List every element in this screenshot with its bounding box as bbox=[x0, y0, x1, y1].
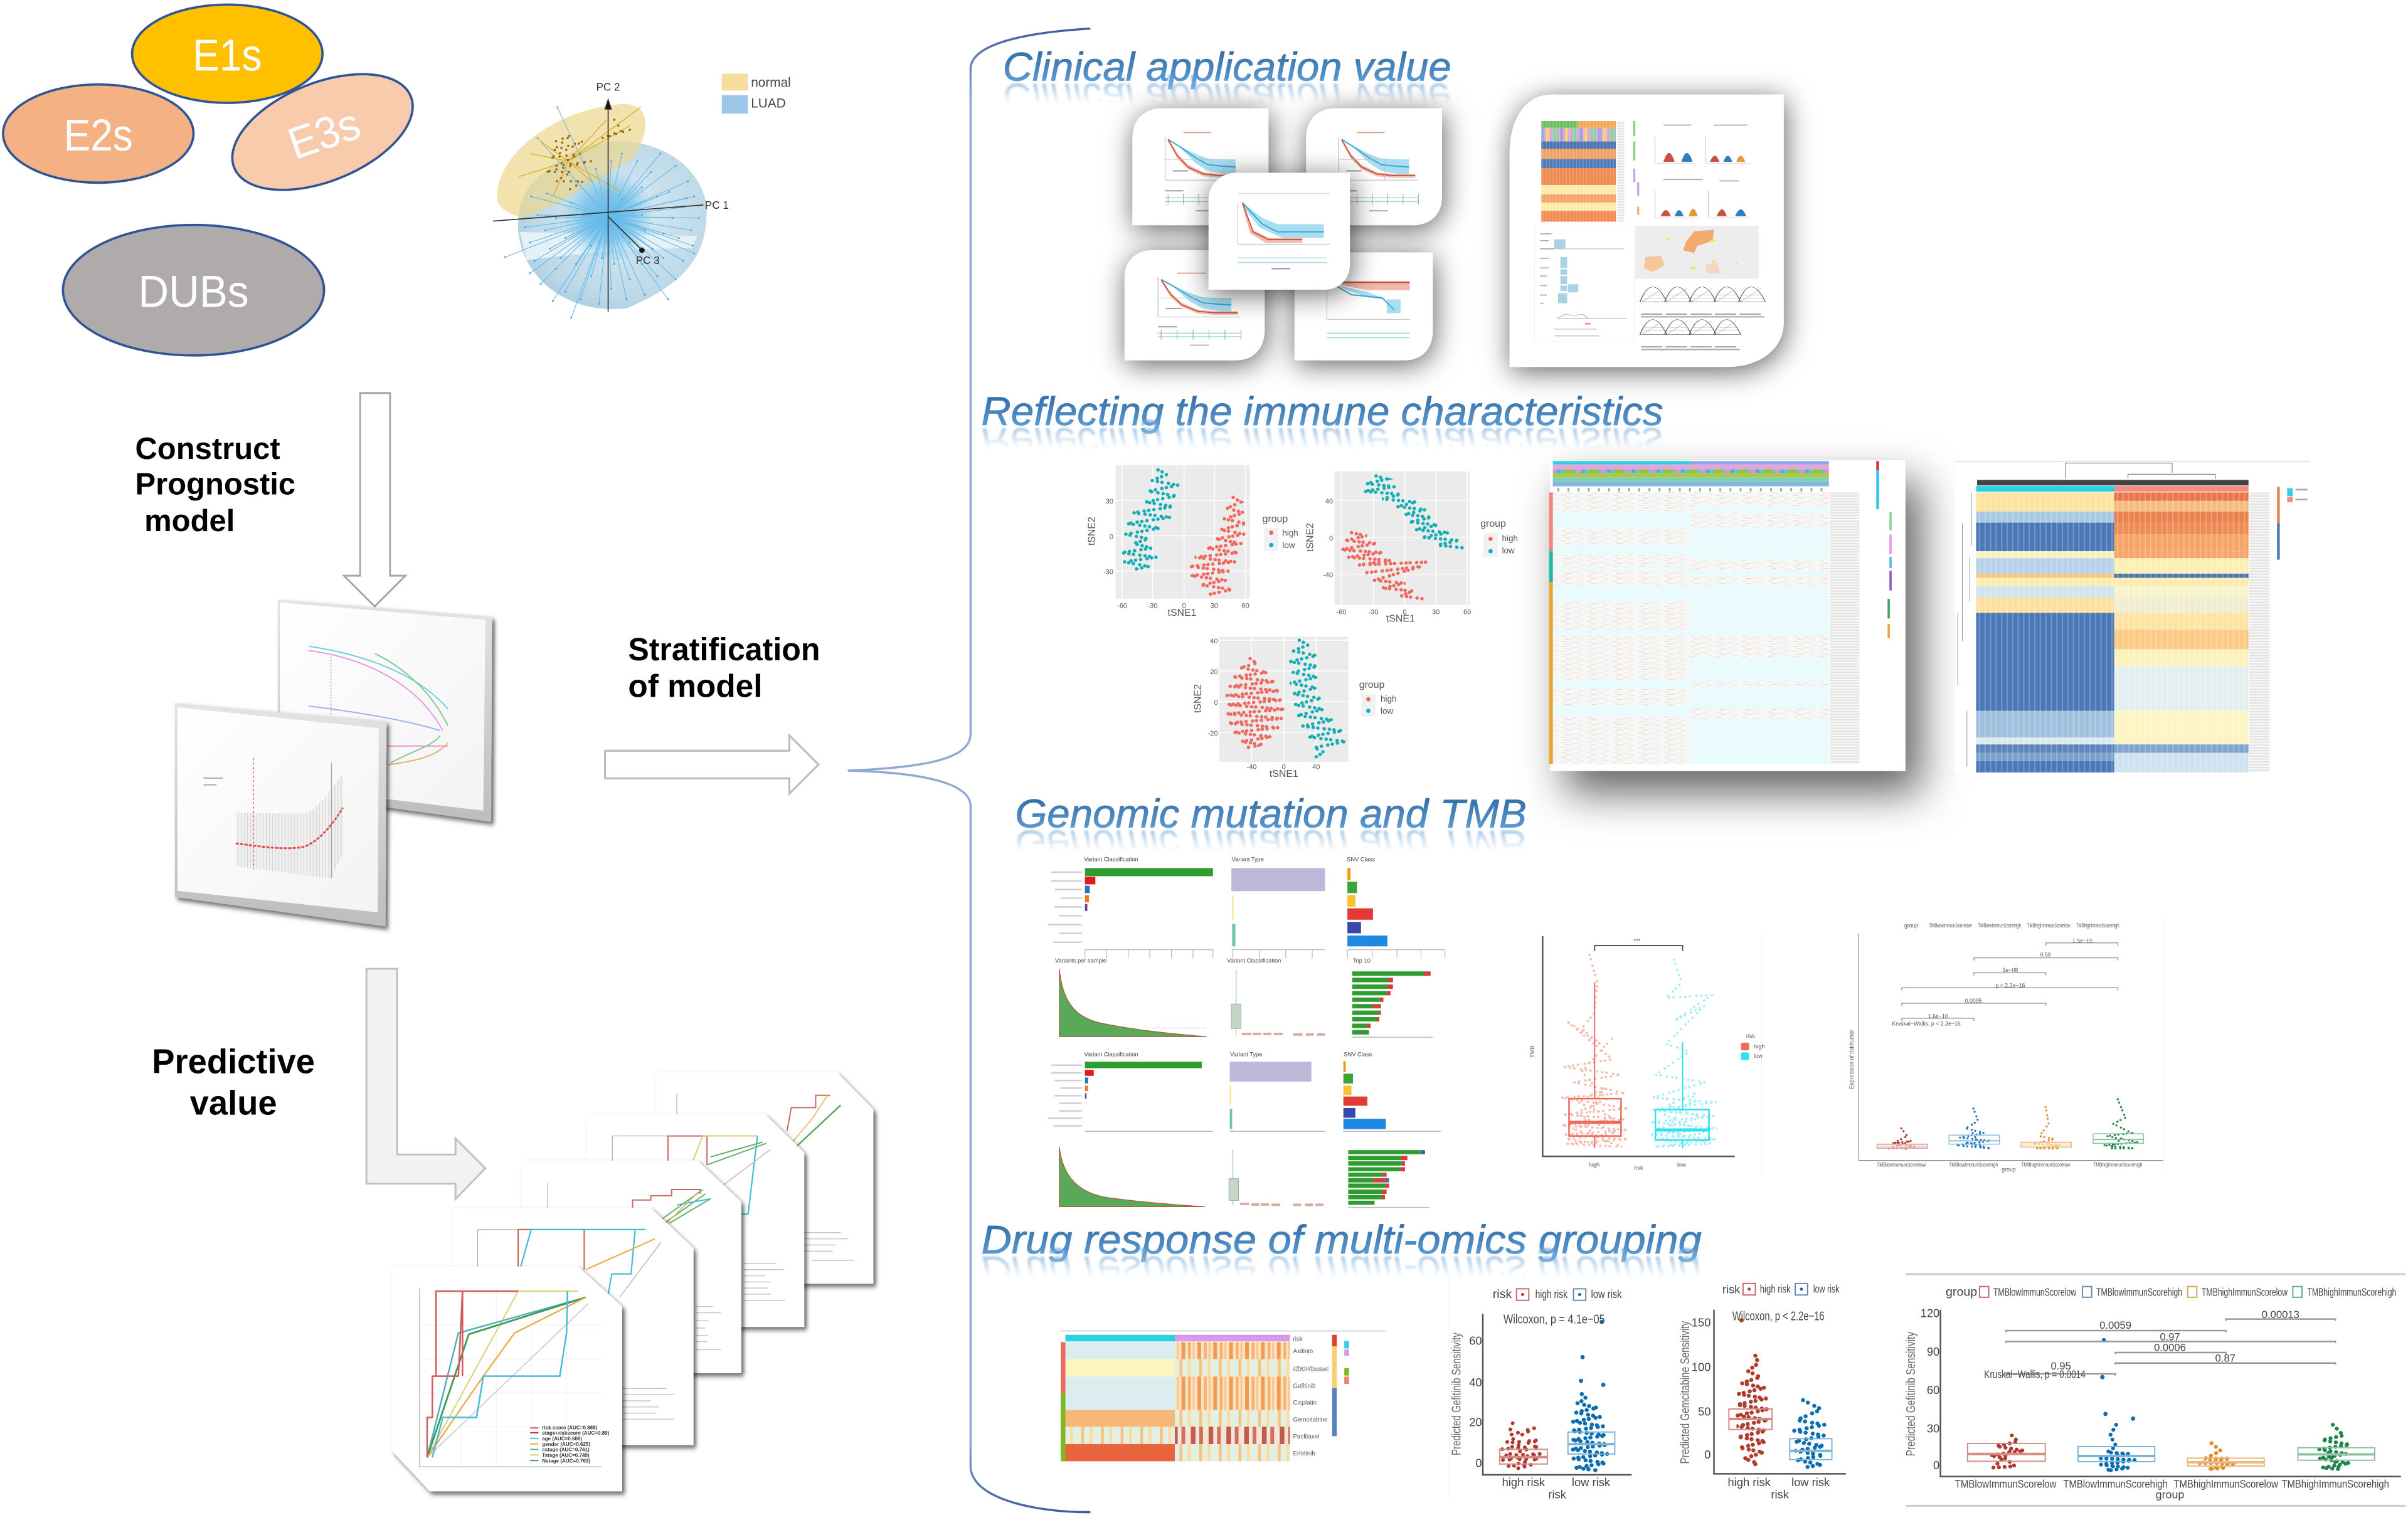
heading: clinical application value bbox=[1003, 45, 1451, 119]
ROC front legend bbox=[542, 1425, 610, 1464]
label: predictive value: value bbox=[190, 1084, 277, 1122]
group chart labels: Kruskal−Wallis, p < 2.2e−16 bbox=[1892, 1020, 1961, 1026]
ROC front legend: Nstage (AUC=0.763) bbox=[542, 1458, 590, 1464]
gefitinib labels: risk bbox=[1548, 1488, 1567, 1501]
heatmap drug labels bbox=[1293, 1336, 1329, 1457]
tSNE plot 2: group bbox=[1480, 519, 1506, 529]
hexagon tile map bbox=[1635, 226, 1759, 279]
chart: predicted gefitinib sensitivity by TMB and immune score bbox=[1904, 1274, 2405, 1506]
gemcitabine labels: risk bbox=[1771, 1488, 1790, 1501]
tSNE plot 1: tSNE1 bbox=[1167, 608, 1197, 618]
tSNE plot 3: tSNE1 bbox=[1270, 769, 1298, 779]
group chart labels: TMBhighImmunScorelow bbox=[2027, 922, 2071, 929]
gefitinib points bbox=[1502, 1394, 1608, 1471]
panel: immune gene expression heatmap bbox=[1955, 462, 2310, 773]
panel: immune cell heatmap with annotations bbox=[1549, 460, 1906, 771]
TMB boxes bbox=[1542, 933, 1762, 1173]
mutation plot titles bbox=[1055, 857, 1375, 1057]
multi-group labels: group bbox=[1946, 1285, 1977, 1299]
mutation plot titles: SNV Class bbox=[1344, 1051, 1372, 1057]
ROC card 4 bbox=[587, 1114, 804, 1327]
ROC front legend: age (AUC=0.688) bbox=[542, 1436, 582, 1442]
TMB labels: *** bbox=[1634, 937, 1641, 944]
TMB labels: high bbox=[1589, 1162, 1599, 1168]
group chart labels: p < 2.2e−16 bbox=[1995, 982, 2025, 988]
gefitinib boxes bbox=[1449, 1279, 1631, 1499]
multi-group labels: Kruskal−Wallis, p = 0.0014 bbox=[1984, 1368, 2086, 1380]
tSNE plot 1: -30 bbox=[1103, 569, 1113, 576]
heatmap: drug sensitivity by risk bbox=[1060, 1331, 1386, 1461]
TMB labels: TMB bbox=[1529, 1045, 1535, 1058]
heatmap drug labels: Axitinib bbox=[1293, 1348, 1313, 1355]
mutation plot titles: Top 10 bbox=[1353, 958, 1371, 964]
chart: 3D PCA normal vs LUAD bbox=[493, 74, 791, 318]
mutation plot titles: SNV Class bbox=[1347, 857, 1375, 863]
PCA LUAD spikes and points bbox=[506, 107, 699, 318]
gemcitabine labels: 0 bbox=[1704, 1448, 1711, 1461]
gemcitabine labels bbox=[1678, 1283, 1840, 1501]
gemcitabine labels: low risk bbox=[1791, 1475, 1830, 1489]
multi-group labels: 0.00013 bbox=[2262, 1309, 2299, 1321]
group chart labels: 1.5e−15 bbox=[2072, 937, 2092, 944]
tSNE plot 2: low bbox=[1502, 546, 1515, 556]
gemcitabine labels: high risk bbox=[1727, 1475, 1771, 1489]
gemcitabine labels: 150 bbox=[1692, 1316, 1711, 1329]
PCA legend: normal bbox=[751, 75, 791, 90]
card: survival curve centre bbox=[1209, 172, 1350, 290]
heatmap drug labels: AZD6244/Docetaxel bbox=[1293, 1366, 1329, 1373]
panel: clinical survival cards bbox=[1125, 95, 1784, 367]
mutation plot titles: Variant Type bbox=[1230, 1051, 1262, 1057]
gemcitabine labels: 100 bbox=[1692, 1360, 1711, 1373]
gemcitabine labels: Predicted Gemcitabine Sensitivity bbox=[1678, 1321, 1692, 1464]
mutation summary set 1 bbox=[1048, 868, 1445, 1037]
multi-group points bbox=[1990, 1425, 2350, 1471]
tSNE plot 1: 30 bbox=[1211, 603, 1218, 610]
label: predictive value bbox=[152, 1042, 315, 1122]
label: stratification of model bbox=[628, 631, 820, 704]
multi-group labels: TMBhighImmunScorehigh bbox=[2282, 1477, 2389, 1490]
tSNE plot 3: high bbox=[1381, 694, 1396, 704]
heatmap drug labels: Gefitinib bbox=[1293, 1383, 1316, 1390]
group chart labels: TMBhighImmunScorehigh bbox=[2093, 1162, 2143, 1168]
PCA axis labels bbox=[597, 80, 729, 266]
heading: drug response of multi-omics grouping: Drug response of multi-omics grouping bbox=[981, 1248, 1702, 1292]
label: construct prognostic model: Construct bbox=[135, 432, 280, 466]
panel: LASSO model charts bbox=[175, 599, 492, 927]
tSNE plot 3 bbox=[1193, 636, 1396, 779]
forest plot bbox=[1535, 226, 1635, 341]
tSNE plot 2: -60 bbox=[1336, 608, 1346, 616]
PCA legend bbox=[722, 74, 791, 113]
gefitinib labels bbox=[1449, 1287, 1622, 1501]
tSNE plot 1: 30 bbox=[1106, 498, 1113, 505]
group chart labels: 3e−08 bbox=[2003, 967, 2018, 973]
group chart labels: 0.0095 bbox=[1965, 998, 1982, 1004]
chart: TMB box plot by risk bbox=[1529, 933, 1765, 1173]
tSNE plot 1: -30 bbox=[1148, 603, 1157, 610]
tSNE plot 1: low bbox=[1282, 541, 1295, 550]
heading: reflecting the immune characteristics: Reflecting the immune characteristics bbox=[981, 389, 1663, 434]
ellipse: E2s: E2s bbox=[64, 111, 133, 161]
ROC card 3 bbox=[522, 1161, 741, 1373]
ROC front legend: cstage (AUC=0.761) bbox=[542, 1447, 590, 1453]
gemcitabine boxes bbox=[1714, 1310, 1846, 1474]
gemcitabine labels: high risk bbox=[1760, 1283, 1791, 1295]
multi-group labels: 0 bbox=[1933, 1459, 1939, 1472]
ellipse: DUBs bbox=[63, 225, 324, 356]
card: survival curve bottom right bbox=[1295, 253, 1433, 361]
group chart labels: 0.58 bbox=[2040, 951, 2051, 958]
chart: predicted gefitinib sensitivity by risk bbox=[1449, 1279, 1631, 1501]
arrow: down to prognostic model bbox=[344, 393, 405, 606]
PCA legend: LUAD bbox=[751, 96, 786, 110]
heatmap drug labels: Cisplatin bbox=[1293, 1400, 1317, 1406]
ellipse: E2s bbox=[3, 85, 193, 182]
group boxes and axes bbox=[1859, 919, 2163, 1170]
panel: stacked ROC curve cards bbox=[392, 1072, 873, 1491]
tSNE plot 1: 60 bbox=[1241, 603, 1249, 610]
tSNE plot 2: 40 bbox=[1325, 498, 1333, 505]
multi-group labels: TMBlowImmunScorehigh bbox=[2063, 1477, 2168, 1490]
heatmap: clinical annotations and genes bbox=[1541, 121, 1638, 222]
group scatter points bbox=[1889, 1099, 2138, 1150]
tSNE plot 2: tSNE1 bbox=[1386, 614, 1415, 625]
tSNE plot 3: tSNE2 bbox=[1193, 684, 1204, 713]
card: survival curve bottom left bbox=[1125, 250, 1265, 361]
PCA axes bbox=[493, 100, 703, 312]
bracket: stratification bbox=[847, 29, 1090, 1512]
label: construct prognostic model: Prognostic bbox=[135, 467, 295, 501]
tSNE plot 2: tSNE2 bbox=[1305, 523, 1315, 552]
heatmap drug labels: Erlotinib bbox=[1293, 1450, 1315, 1457]
tSNE plot 3: -40 bbox=[1246, 764, 1256, 771]
heading: genomic mutation and TMB: Genomic mutation and TMB bbox=[1015, 822, 1527, 867]
TMB labels: low bbox=[1677, 1162, 1686, 1168]
gemcitabine labels: low risk bbox=[1813, 1283, 1840, 1295]
panel: cross-validation plot bbox=[175, 703, 386, 927]
gemcitabine labels: 50 bbox=[1698, 1405, 1711, 1418]
TMB scatter points bbox=[1562, 955, 1717, 1147]
tSNE plot 2: 0 bbox=[1329, 535, 1333, 542]
gefitinib labels: Wilcoxon, p = 4.1e−05 bbox=[1504, 1312, 1605, 1326]
ROC card 5 bbox=[656, 1072, 873, 1284]
label: construct prognostic model bbox=[135, 432, 295, 538]
PCA axis labels: PC 3 bbox=[636, 254, 660, 266]
card: multi-panel clinical figure bbox=[1510, 95, 1784, 367]
gefitinib labels: high risk bbox=[1502, 1475, 1546, 1489]
multi-group labels: 0.0059 bbox=[2099, 1319, 2131, 1331]
label: stratification of model: Stratification bbox=[628, 631, 820, 667]
ellipse: E3s bbox=[216, 51, 429, 213]
dendrogram bbox=[1955, 462, 2310, 767]
multi-group labels: TMBlowImmunScorelow bbox=[1955, 1477, 2056, 1490]
mutation plot titles: Variant Classification bbox=[1085, 857, 1138, 863]
heading: drug response of multi-omics grouping bbox=[981, 1218, 1702, 1292]
group chart labels bbox=[1848, 922, 2143, 1173]
multi-group labels: TMBlowImmunScorelow bbox=[1993, 1285, 2077, 1298]
heading: clinical application value: Clinical application value bbox=[1003, 75, 1451, 119]
gemcitabine labels: Wilcoxon, p < 2.2e−16 bbox=[1732, 1310, 1825, 1324]
ROC front legend: stage+riskscore (AUC=0.89) bbox=[542, 1430, 610, 1436]
tSNE plot 1: tSNE2 bbox=[1087, 517, 1098, 546]
tSNE plot 1 bbox=[1087, 465, 1298, 618]
multi-group labels: 90 bbox=[1927, 1345, 1939, 1358]
label: predictive value: Predictive bbox=[152, 1042, 315, 1080]
panel: tSNE plots bbox=[1087, 465, 1518, 779]
PCA axis labels: PC 2 bbox=[597, 80, 620, 93]
heatmap drug labels: risk bbox=[1293, 1336, 1303, 1343]
ROC card 1 front bbox=[392, 1267, 622, 1491]
tSNE plot 3: 20 bbox=[1210, 668, 1218, 676]
multi-group labels: 0.0006 bbox=[2154, 1342, 2186, 1354]
mutation plot titles: Variant Classification bbox=[1227, 958, 1281, 964]
mutation summary set 2 bbox=[1048, 1061, 1441, 1208]
panel: coefficient path plot bbox=[278, 599, 492, 822]
tSNE plot 1: group bbox=[1263, 514, 1288, 524]
ROC front legend: gender (AUC=0.625) bbox=[542, 1442, 590, 1447]
group chart labels: TMBlowImmunScorelow bbox=[1877, 1162, 1926, 1168]
ROC card 2 bbox=[452, 1208, 694, 1445]
tSNE plot 3: 0 bbox=[1282, 764, 1286, 771]
ellipse: E1s bbox=[132, 4, 322, 103]
tSNE plot 2: -40 bbox=[1323, 572, 1333, 579]
arrow: L-shaped to ROC curves bbox=[366, 969, 485, 1199]
gefitinib labels: high risk bbox=[1535, 1287, 1568, 1300]
label: construct prognostic model: model bbox=[144, 504, 235, 538]
group chart labels: TMBhighImmunScorehigh bbox=[2076, 922, 2119, 929]
ellipse: E1s: E1s bbox=[193, 31, 262, 81]
tSNE plot 3: 40 bbox=[1312, 764, 1320, 771]
gefitinib labels: Predicted Gefitinib Sensitivity bbox=[1449, 1332, 1463, 1455]
TMB legend bbox=[1741, 1043, 1749, 1060]
tSNE plot 2: 60 bbox=[1463, 608, 1471, 616]
group chart labels: TMBhighImmunScorelow bbox=[2021, 1162, 2071, 1168]
multi-group labels: 0.97 bbox=[2160, 1331, 2180, 1343]
gemcitabine labels: risk bbox=[1722, 1283, 1741, 1296]
group chart labels: TMBlowImmunScorelow bbox=[1929, 922, 1972, 929]
gemcitabine points bbox=[1737, 1356, 1825, 1468]
mutation plot titles: Variant Type bbox=[1232, 857, 1264, 863]
multi-group labels: Predicted Gefitinib Sensitivity bbox=[1904, 1331, 1918, 1456]
ROC front legend: Tstage (AUC=0.749) bbox=[542, 1452, 590, 1458]
ROC front legend: risk score (AUC=0.888) bbox=[542, 1425, 598, 1430]
heading: genomic mutation and TMB bbox=[1015, 792, 1527, 867]
TMB labels: high bbox=[1754, 1043, 1765, 1050]
mutation plot titles: Variant Classification bbox=[1085, 1051, 1138, 1057]
multi-group labels: TMBhighImmunScorelow bbox=[2202, 1285, 2288, 1298]
mutation plot titles: Variants per sample bbox=[1055, 958, 1106, 964]
tSNE plot 3: low bbox=[1381, 706, 1394, 715]
gene labels and legend bbox=[2249, 487, 2308, 773]
card: survival curve top left bbox=[1132, 108, 1268, 225]
multi-group labels: 0.87 bbox=[2215, 1353, 2236, 1364]
gefitinib labels: 0 bbox=[1475, 1456, 1482, 1469]
gefitinib labels: low risk bbox=[1591, 1287, 1622, 1300]
arrow: stratification to right panels bbox=[605, 736, 819, 794]
tSNE plot 3: 0 bbox=[1214, 699, 1218, 707]
heading: reflecting the immune characteristics bbox=[981, 389, 1663, 464]
chart: predicted gemcitabine sensitivity by risk bbox=[1678, 1283, 1846, 1501]
gefitinib labels: 40 bbox=[1469, 1376, 1482, 1389]
heatmap drug labels: Paclitaxel bbox=[1293, 1433, 1319, 1440]
card: survival curve top right bbox=[1306, 108, 1442, 225]
label: stratification of model: of model bbox=[628, 668, 763, 704]
gefitinib labels: 60 bbox=[1469, 1334, 1482, 1348]
heat rows bbox=[1976, 492, 2249, 773]
TMB labels: risk bbox=[1634, 1165, 1643, 1171]
multi-group labels: 60 bbox=[1927, 1383, 1939, 1396]
heatmap drug labels: Gemcitabine bbox=[1293, 1417, 1327, 1423]
PCA normal spikes and points bbox=[519, 107, 640, 196]
group chart labels: group bbox=[1904, 922, 1919, 929]
group chart labels: 1.6e−10 bbox=[1928, 1013, 1948, 1019]
ellipse: DUBs: DUBs bbox=[138, 268, 249, 317]
tSNE plot 3: 40 bbox=[1210, 638, 1218, 645]
multi-group labels bbox=[1904, 1285, 2396, 1501]
tSNE plot 1: 0 bbox=[1110, 533, 1113, 541]
multi-group labels: 0.95 bbox=[2050, 1360, 2071, 1372]
tSNE plot 1: -60 bbox=[1117, 603, 1127, 610]
group chart labels: TMBlowImmunScorehigh bbox=[1978, 922, 2021, 929]
multi-group labels: TMBlowImmunScorehigh bbox=[2096, 1285, 2182, 1298]
heading: drug response of multi-omics grouping: Drug response of multi-omics grouping bbox=[981, 1218, 1702, 1262]
ROC arcs grid bbox=[1640, 287, 1765, 349]
heading: reflecting the immune characteristics: Reflecting the immune characteristics bbox=[981, 419, 1663, 464]
group chart labels: TMBlowImmunScorehigh bbox=[1949, 1162, 1998, 1168]
group chart labels: group bbox=[2002, 1166, 2016, 1173]
heading: genomic mutation and TMB: Genomic mutation and TMB bbox=[1015, 792, 1527, 836]
tSNE plot 2: -30 bbox=[1369, 608, 1379, 616]
PCA axis labels: PC 1 bbox=[705, 199, 729, 211]
PCA ellipsoids bbox=[497, 104, 707, 309]
TMB labels bbox=[1529, 937, 1765, 1171]
tSNE plot 2: 30 bbox=[1432, 608, 1440, 616]
TMB labels: low bbox=[1754, 1053, 1763, 1059]
heading: clinical application value: Clinical application value bbox=[1003, 45, 1451, 90]
panel: ubiquitin enzyme groups bbox=[3, 4, 429, 356]
ellipse: E3s: E3s bbox=[282, 99, 366, 169]
multi-group boxes and brackets bbox=[1906, 1274, 2405, 1506]
tSNE plot 2: 0 bbox=[1403, 608, 1407, 616]
multi-group labels: group bbox=[2156, 1489, 2184, 1501]
tSNE plot 1: high bbox=[1282, 528, 1298, 537]
TMB labels: risk bbox=[1746, 1033, 1756, 1039]
tSNE plot 3: -20 bbox=[1208, 730, 1218, 737]
panel: mutation summary plots bbox=[1048, 868, 1445, 1208]
tSNE plot 3: group bbox=[1359, 680, 1385, 690]
mini violin plots bbox=[1655, 125, 1750, 218]
gefitinib labels: 20 bbox=[1469, 1416, 1482, 1429]
gefitinib labels: low risk bbox=[1572, 1475, 1611, 1489]
tSNE plot 2: high bbox=[1502, 534, 1518, 543]
multi-group labels: 30 bbox=[1927, 1422, 1939, 1435]
multi-group labels: 120 bbox=[1921, 1307, 1939, 1320]
tSNE plot 2 bbox=[1305, 472, 1518, 625]
multi-group labels: TMBhighImmunScorelow bbox=[2173, 1477, 2278, 1490]
chart: expression by TMB and immune score groups bbox=[1848, 919, 2163, 1173]
group chart labels: Expression of risk/tumor bbox=[1848, 1030, 1855, 1089]
gefitinib labels: risk bbox=[1493, 1287, 1512, 1301]
tSNE plot 1: 0 bbox=[1182, 603, 1186, 610]
